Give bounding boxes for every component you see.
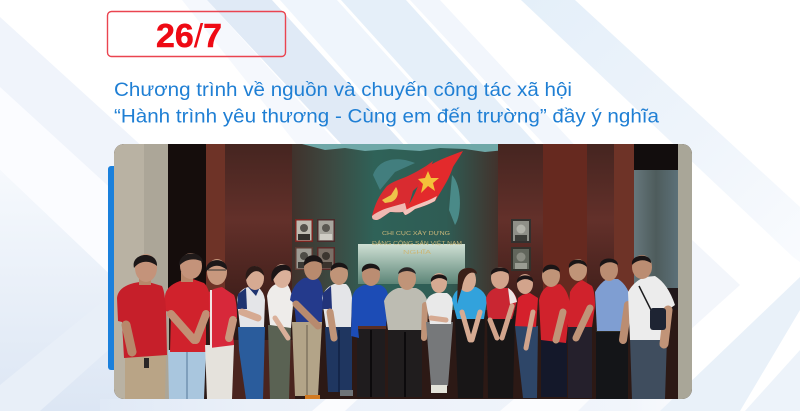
person 11 [452,268,487,398]
heading: “Hành trình yêu thương - Cùng em đến trường” đầy ý nghĩa [114,106,659,128]
person 13 [515,274,538,398]
group photo illustration [114,144,692,399]
person 16 [595,258,631,399]
floor [169,310,678,399]
date badge [108,12,286,56]
heading: Chương trình về nguồn và chuyến công tác xã hội [114,79,572,101]
person 4 [237,266,265,399]
flags emblem [372,151,463,220]
person 2 [165,253,212,399]
inscription [372,230,462,256]
person 9 [384,267,428,397]
person 15 [568,259,595,398]
person 12 [486,267,517,398]
person 6 [290,255,323,399]
green memorial wall [292,144,498,314]
light panel [358,244,465,284]
inscription: ĐẢNG CỘNG SẢN VIỆT NAM [372,239,462,247]
person 17 [628,255,675,399]
right window [634,144,678,310]
person 3 [205,259,237,399]
heading [114,79,659,128]
person 14 [539,265,570,397]
left beige wall [114,144,169,399]
inscription: NGHĨA [403,249,432,256]
brown wall left [206,144,292,314]
portraits [295,219,531,271]
dark doorway [168,144,206,294]
inscription: CHI CỤC XÂY DỰNG [382,230,450,237]
brown wall right [498,144,634,319]
person 8 [351,264,388,397]
date badge: 26/7 [156,17,222,54]
person 10 [426,273,453,393]
mural clouds [302,144,518,225]
person 5 [267,264,293,399]
right beige wall [678,144,692,399]
blue accent bar [108,166,118,370]
person 7 [322,263,353,396]
person 1 [117,254,167,399]
